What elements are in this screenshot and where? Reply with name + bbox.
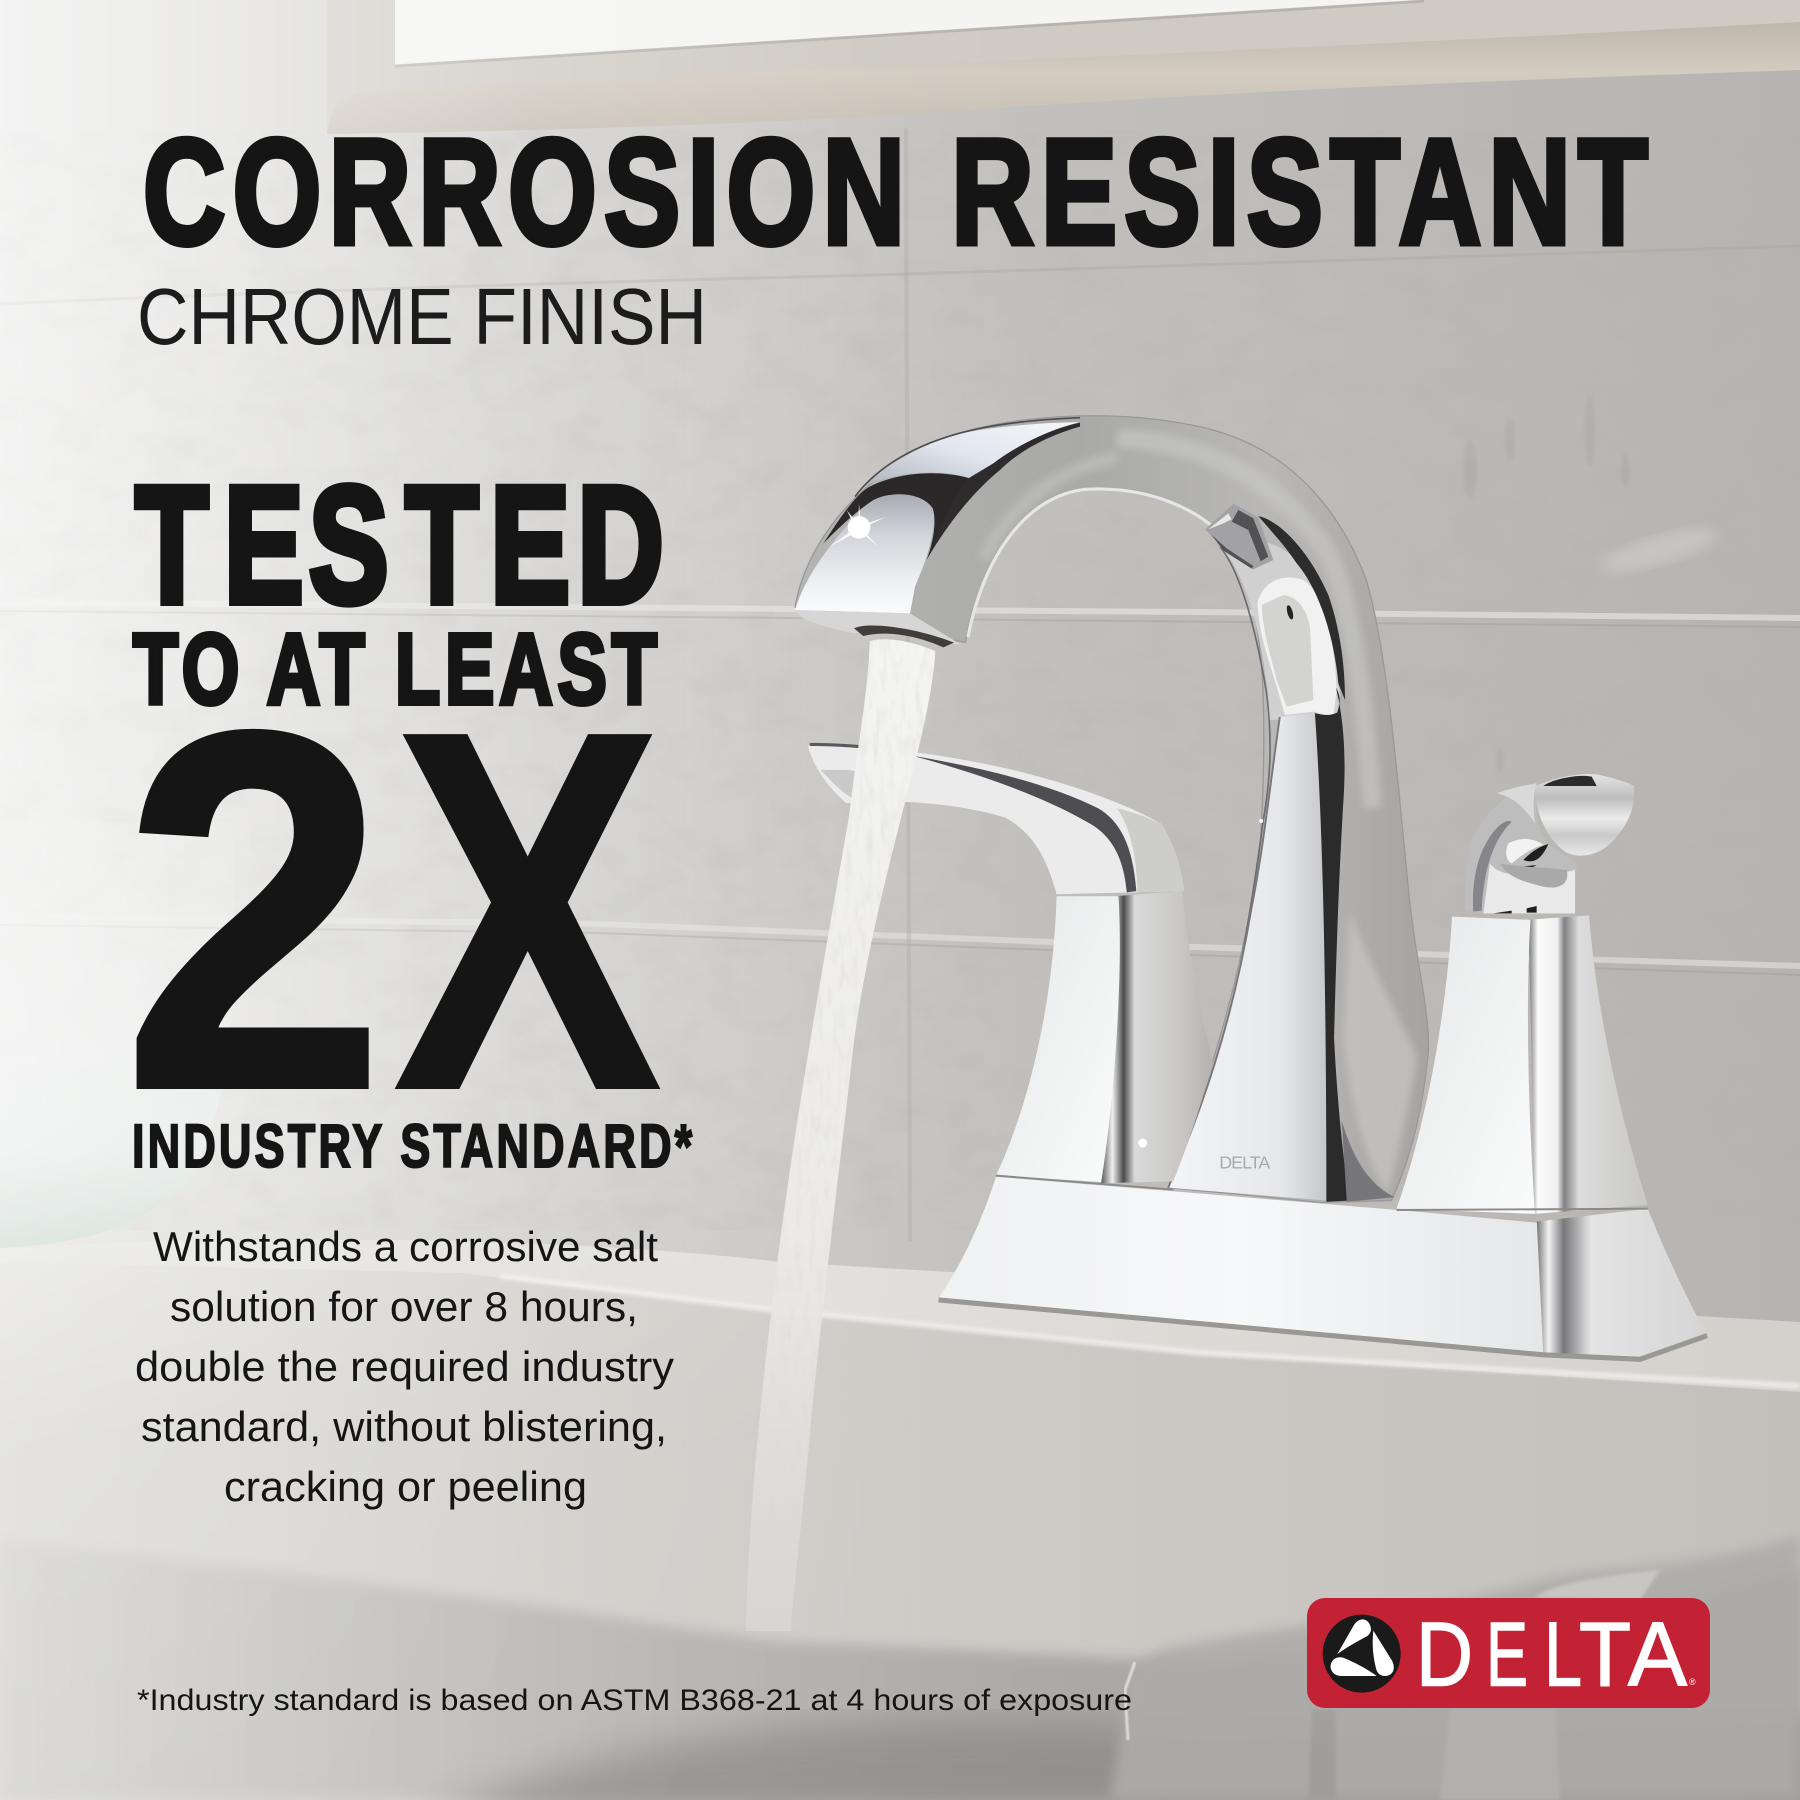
sink basin — [0, 1262, 1800, 1800]
claim: to at least: TO AT LEAST — [133, 613, 657, 725]
logo wordmark: L — [1544, 1604, 1582, 1706]
logo circle mark — [1323, 1615, 1401, 1693]
neck specular — [1259, 819, 1263, 823]
claim: tested: TESTED — [135, 452, 664, 638]
Delta logo — [1307, 1598, 1710, 1708]
knob stem arm — [1465, 782, 1577, 914]
bottom dark falloff — [420, 1719, 1800, 1800]
neck lower right reflection — [1344, 910, 1417, 1194]
reflection bright patch — [1257, 578, 1337, 717]
faucet reflection in basin — [1110, 1535, 1800, 1800]
top dark lines — [1212, 510, 1268, 569]
copy block — [122, 108, 1648, 1717]
top outline — [855, 418, 1080, 497]
neck base shadow — [1342, 1121, 1395, 1202]
right handle body — [1397, 915, 1648, 1214]
faucet spout arch and neck — [795, 416, 1428, 1202]
logo wordmark: E — [1486, 1604, 1528, 1706]
claim: 2X: 2 — [122, 626, 386, 1196]
counter top — [0, 1240, 1800, 1400]
lever top edge — [810, 744, 913, 755]
body text: Withstands a corrosive salt — [153, 1223, 658, 1270]
tile mottling — [0, 130, 1800, 1230]
lever tip underside — [821, 770, 901, 801]
deck right chrome — [1537, 1209, 1705, 1357]
nose sparkle — [830, 503, 887, 547]
footnote: *Industry standard is based on ASTM B368-21 at 4 hours of exposure — [137, 1684, 1132, 1717]
joint shadow — [996, 1176, 1648, 1210]
DELTA engraving: DELTA — [1219, 1153, 1270, 1173]
nose underside — [795, 610, 962, 645]
window sill — [327, 22, 1800, 134]
reflection base — [1220, 540, 1340, 720]
neck reflections — [1205, 504, 1345, 980]
aerator ring — [854, 625, 954, 647]
tile grout lines — [0, 130, 1800, 1240]
soap dish bowl — [0, 822, 235, 1248]
body text: standard, without blistering, — [141, 1403, 667, 1450]
logo wordmark: T — [1579, 1604, 1631, 1706]
subtitle: CHROME FINISH — [137, 272, 707, 361]
lever dark shine — [913, 756, 1136, 892]
blade left edge — [1168, 717, 1280, 1188]
logo red badge — [1307, 1598, 1710, 1708]
arch soft bands — [983, 457, 1117, 559]
small dark dot — [1286, 605, 1294, 620]
dark arc behind neck — [1258, 516, 1345, 700]
wet highlight on tile — [1598, 520, 1722, 580]
dark channel — [1315, 688, 1350, 1202]
inner arch rim light — [968, 489, 1232, 637]
knob paddle dark top — [1543, 776, 1597, 786]
body text: solution for over 8 hours, — [170, 1283, 638, 1330]
nose face — [795, 495, 934, 613]
nose top bright band — [862, 422, 1080, 487]
wedge dark reflection — [927, 423, 1080, 560]
body text — [135, 1223, 674, 1510]
basin lower shadow — [0, 1540, 1800, 1800]
left white haze overlay — [0, 0, 748, 1557]
claim: 2X: X — [394, 626, 663, 1196]
top dark pieces — [1205, 504, 1273, 569]
spout nose — [795, 418, 1080, 647]
right knob handle — [1465, 774, 1634, 914]
logo wordmark: D — [1416, 1604, 1473, 1706]
left body specular — [1138, 1139, 1147, 1148]
left body face — [996, 896, 1120, 1182]
left edge line — [1220, 547, 1270, 980]
title: CORROSION RESISTANT — [143, 108, 1648, 276]
neck front blade — [1168, 688, 1395, 1202]
claim: industry standard: INDUSTRY STANDARD* — [132, 1112, 692, 1181]
window frame inner shadow — [395, 1, 1424, 66]
logo wordmark: A — [1628, 1604, 1687, 1706]
knob paddle — [1535, 774, 1634, 856]
left lever handle — [808, 744, 1184, 894]
faucet — [746, 416, 1707, 1631]
body text: cracking or peeling — [224, 1463, 587, 1510]
deck plate — [939, 1176, 1707, 1359]
right body chrome side — [1529, 915, 1648, 1214]
nose dark band — [823, 473, 970, 560]
claim: 2X — [122, 626, 663, 1196]
wall stains — [1463, 394, 1629, 774]
left handle body — [996, 891, 1213, 1183]
registered mark: ® — [1689, 1677, 1696, 1687]
deck bottom lip — [939, 1300, 1707, 1359]
deck front face — [939, 1177, 1543, 1354]
reflection grey panel — [1262, 595, 1313, 707]
knob stem dark details — [1493, 844, 1548, 913]
window glass — [395, 0, 1424, 65]
knob stem light — [1483, 863, 1575, 913]
knob stem arm reflection — [1473, 821, 1512, 912]
lever right soft face — [1117, 808, 1184, 892]
logo wordmark — [1416, 1604, 1687, 1706]
body text: double the required industry — [135, 1343, 674, 1390]
water stream — [746, 639, 935, 1631]
right body face — [1397, 917, 1535, 1214]
left body chrome side — [1101, 891, 1213, 1183]
rim highlight — [500, 1276, 1800, 1386]
window frame — [327, 0, 1800, 132]
